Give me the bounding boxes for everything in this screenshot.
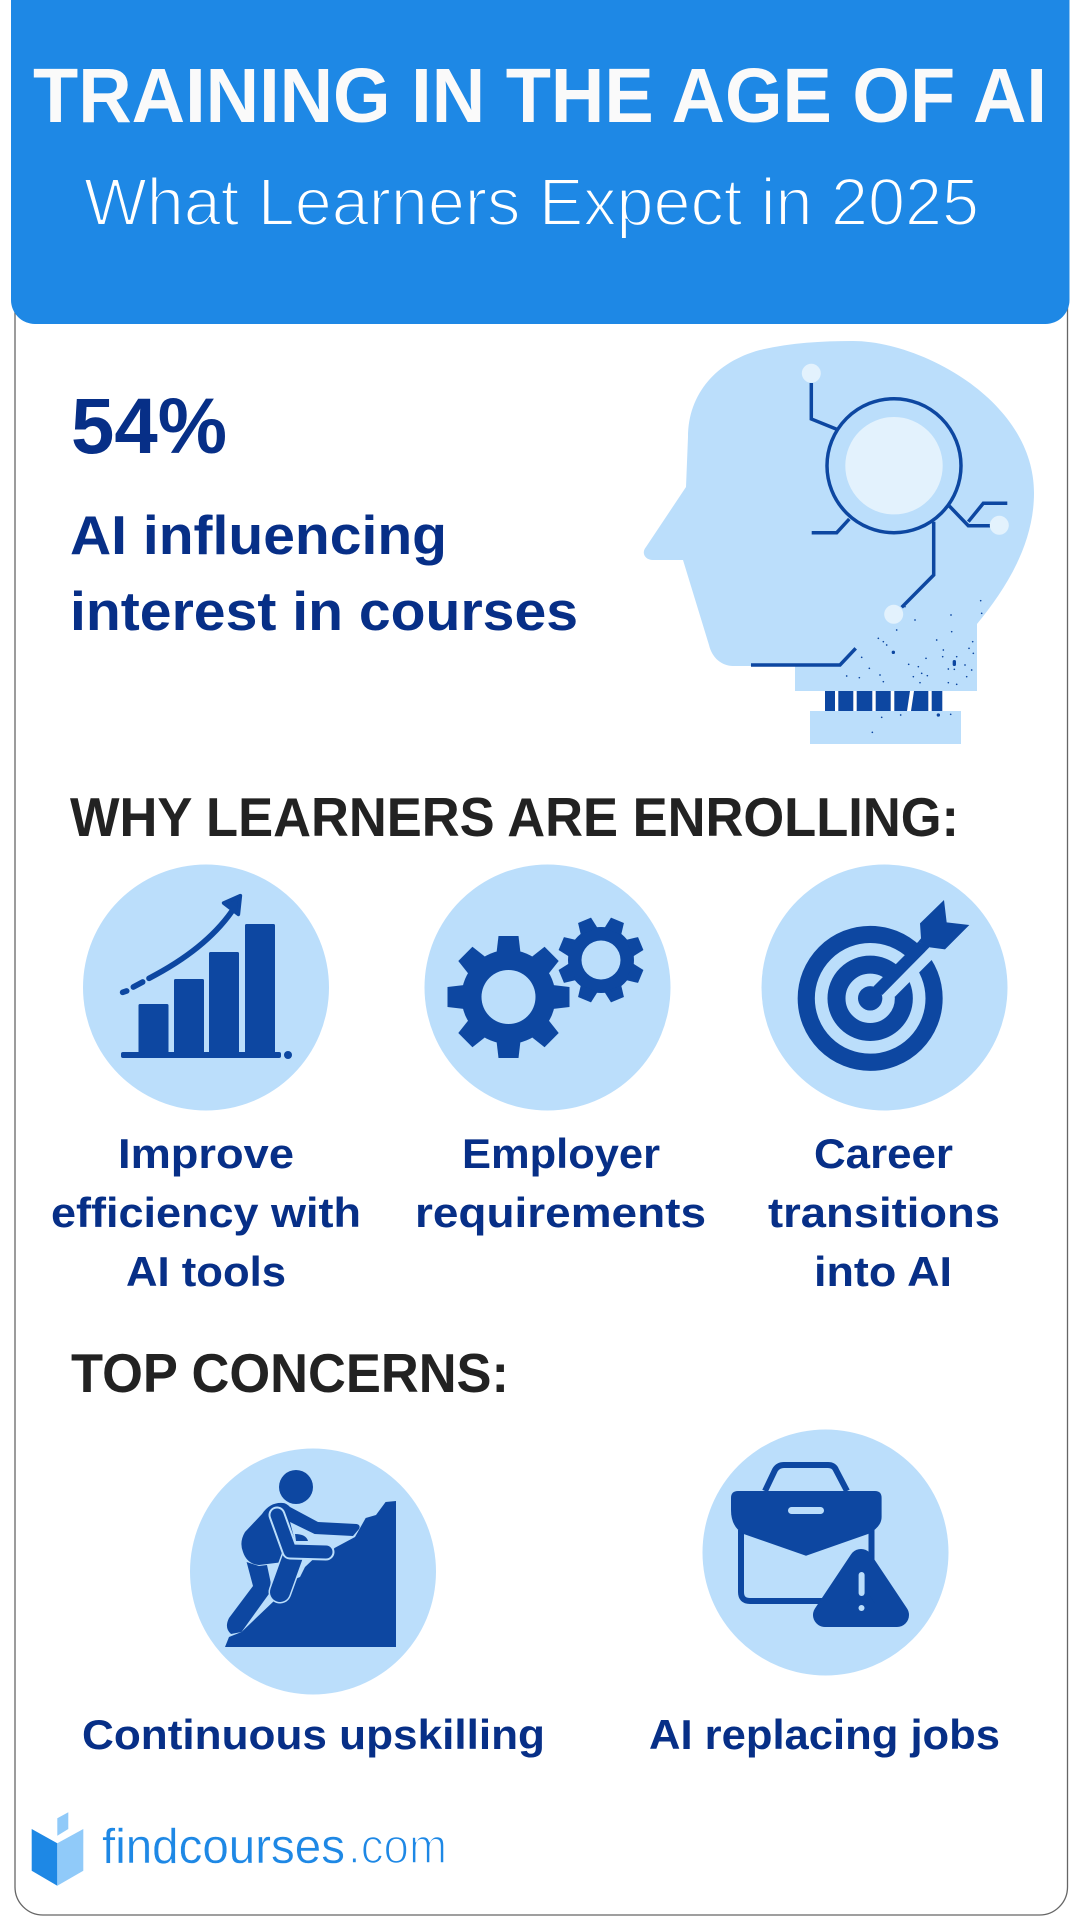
subtitle: What Learners Expect in 2025 [84, 165, 979, 240]
icon: gears [424, 864, 670, 1110]
heading: why learners are enrolling: WHY LEARNERS ARE ENROLLING: [70, 786, 959, 848]
logo wordmark: findcourses [102, 1820, 345, 1874]
label: career transitions [768, 1130, 1000, 1295]
icon: bar chart with rising arrow [83, 864, 329, 1110]
label: continuous upskilling: Continuous upskilling [82, 1711, 545, 1758]
statistic: 54%: 54% [71, 381, 227, 470]
statistic description [70, 504, 578, 642]
heading: top concerns: TOP CONCERNS: [71, 1342, 509, 1404]
label: career transitions: Career [814, 1130, 953, 1177]
logo wordmark: .com [348, 1820, 447, 1874]
icon: briefcase with warning [702, 1430, 948, 1676]
icon: climber on a slope [190, 1448, 436, 1694]
label: AI replacing jobs: AI replacing jobs [649, 1711, 1000, 1758]
header banner [11, 0, 1070, 324]
statistic description: interest in courses [70, 580, 578, 642]
label: career transitions: transitions [768, 1189, 1000, 1236]
label: employer requirements [415, 1130, 706, 1236]
label: employer requirements: requirements [415, 1189, 706, 1236]
statistic description: AI influencing [70, 504, 447, 566]
icon: findcourses logo mark [32, 1812, 83, 1886]
label: improve efficiency: AI tools [126, 1248, 286, 1295]
illustration: AI head [644, 341, 1034, 744]
title: TRAINING IN THE AGE OF AI [33, 53, 1047, 139]
label: improve efficiency: Improve [118, 1130, 294, 1177]
label: improve efficiency: efficiency with [51, 1189, 361, 1236]
label: employer requirements: Employer [462, 1130, 660, 1177]
label: improve efficiency [51, 1130, 361, 1295]
icon: target with arrow [762, 864, 1008, 1110]
label: career transitions: into AI [814, 1248, 952, 1295]
